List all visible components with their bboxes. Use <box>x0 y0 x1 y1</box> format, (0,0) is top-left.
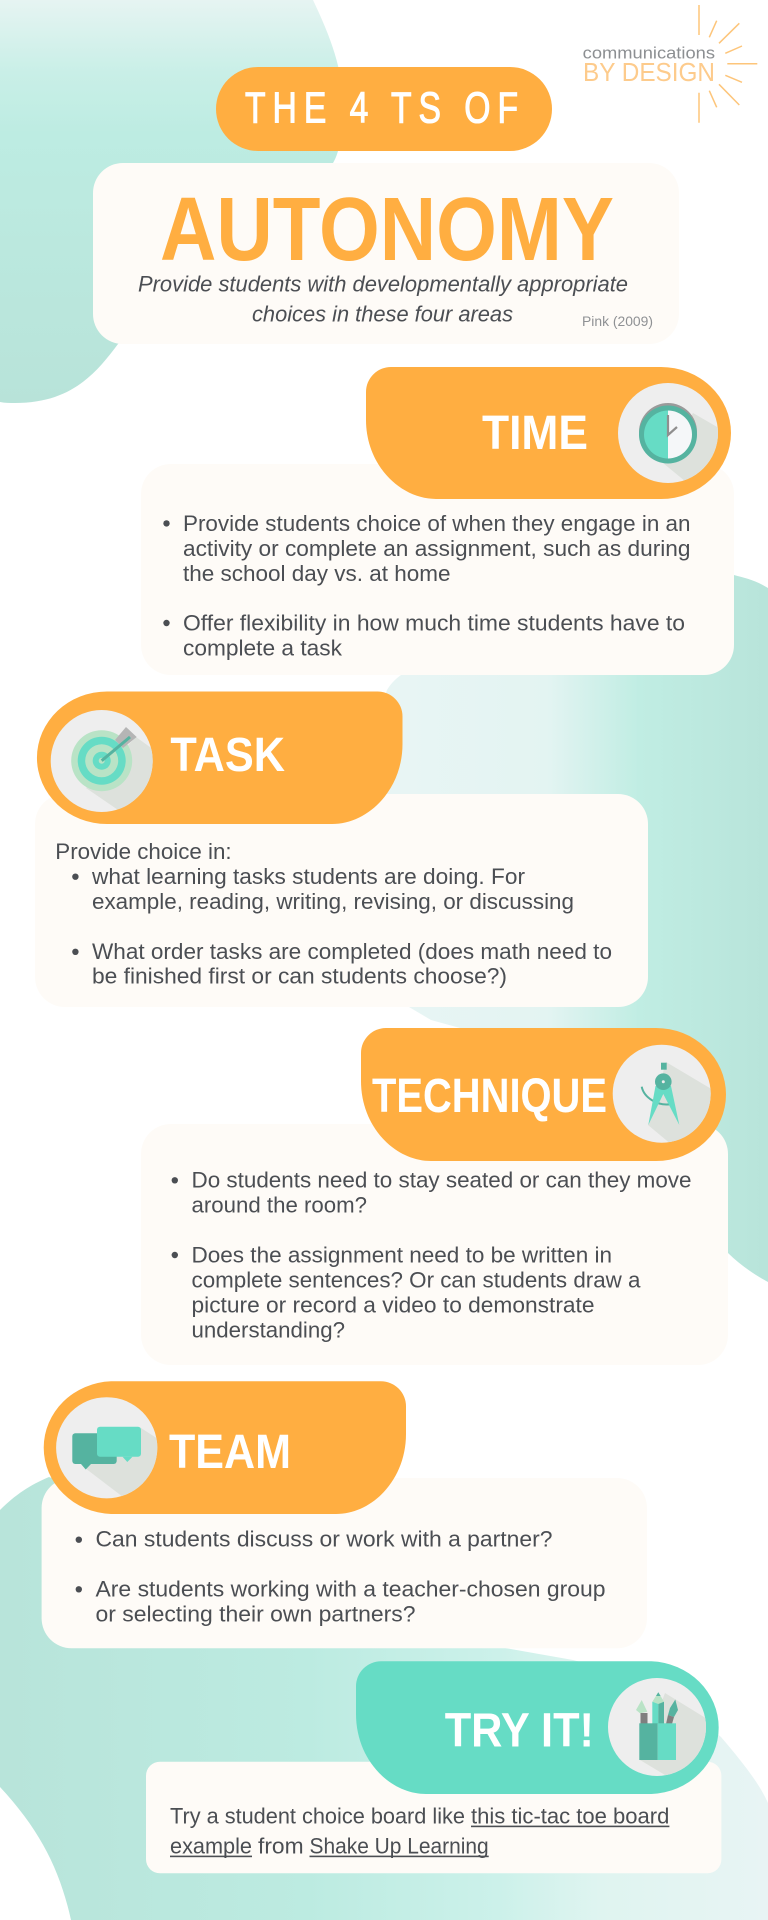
header: task: TASK <box>170 729 285 782</box>
header: time: TIME <box>482 407 588 460</box>
background blob: right <box>360 575 768 1282</box>
panel: task text: What order tasks are completed (does math need to <box>92 939 612 964</box>
panel: try it text: from <box>258 1833 304 1858</box>
subtitle <box>138 272 628 327</box>
header: team: TEAM <box>169 1426 291 1479</box>
panel: time text: Offer flexibility in how much time students have to <box>183 610 685 636</box>
panel: task text <box>35 794 648 1007</box>
header: task <box>37 692 402 824</box>
panel: technique text <box>141 1124 728 1365</box>
citation: Pink (2009) <box>582 313 653 329</box>
icon: pencil cup <box>608 1678 706 1776</box>
logo: communications by design: communications <box>583 43 715 62</box>
panel: team text: Are students working with a teacher-chosen group <box>96 1577 606 1602</box>
panel: task text: what learning tasks students are doing. For <box>91 864 525 889</box>
panel: time text: complete a task <box>183 636 343 660</box>
heading: autonomy: AUTONOMY <box>160 180 614 280</box>
panel: time text <box>141 464 734 675</box>
panel: task text: example, reading, writing, revising, or discussing <box>92 889 574 914</box>
panel: technique text: Does the assignment need to be written in <box>192 1243 612 1268</box>
section: technique <box>172 1028 728 1342</box>
panel: try it text: this tic-tac toe board <box>471 1803 669 1828</box>
logo: communications by design <box>583 5 757 123</box>
header: time <box>366 367 731 499</box>
section: try it <box>146 1661 725 1873</box>
icon: compass <box>612 1044 711 1143</box>
panel: try it text: Try a student choice board like <box>170 1803 465 1828</box>
panel: task text: Provide choice in: <box>55 839 232 864</box>
logo: communications by design: BY DESIGN <box>583 57 715 87</box>
header: technique <box>361 1028 726 1161</box>
subtitle: choices in these four areas <box>252 302 513 327</box>
icon: clock <box>618 383 718 483</box>
background blob: top left <box>0 0 343 403</box>
panel: try it text: example <box>170 1833 252 1858</box>
panel: team text <box>42 1478 647 1648</box>
panel: autonomy title <box>93 163 679 344</box>
section: task <box>35 692 648 1007</box>
title pill: the 4 ts of: THE 4 TS OF <box>245 84 525 132</box>
title pill: the 4 ts of <box>216 67 552 151</box>
panel: technique text: Do students need to stay seated or can they move <box>192 1168 692 1193</box>
panel: team text: or selecting their own partners? <box>96 1602 415 1627</box>
panel: try it text: Shake Up Learning <box>310 1833 489 1858</box>
panel: technique text: picture or record a video to demonstrate <box>192 1293 594 1318</box>
header: team <box>44 1381 406 1514</box>
section: team <box>42 1381 647 1648</box>
section: time <box>141 367 738 675</box>
panel: time text: activity or complete an assignment, such as during <box>183 536 690 561</box>
panel: time text: the school day vs. at home <box>183 561 450 586</box>
icon: chat bubbles <box>56 1397 158 1498</box>
header: try it: TRY IT! <box>445 1705 594 1758</box>
panel: task text: be finished first or can students choose?) <box>92 964 507 988</box>
panel: time text: Provide students choice of when they engage in an <box>183 511 690 536</box>
panel: try it text <box>146 1762 721 1873</box>
panel: technique text: around the room? <box>192 1193 367 1218</box>
header: technique: TECHNIQUE <box>372 1070 607 1123</box>
subtitle: Provide students with developmentally appropriate <box>138 272 628 297</box>
panel: team text: Can students discuss or work with a partner? <box>96 1527 552 1552</box>
header: try it <box>356 1661 719 1794</box>
panel: technique text: complete sentences? Or can students draw a <box>192 1268 641 1293</box>
background blob: bottom <box>0 1477 768 1920</box>
panel: technique text: understanding? <box>192 1317 345 1342</box>
icon: target <box>50 710 153 812</box>
